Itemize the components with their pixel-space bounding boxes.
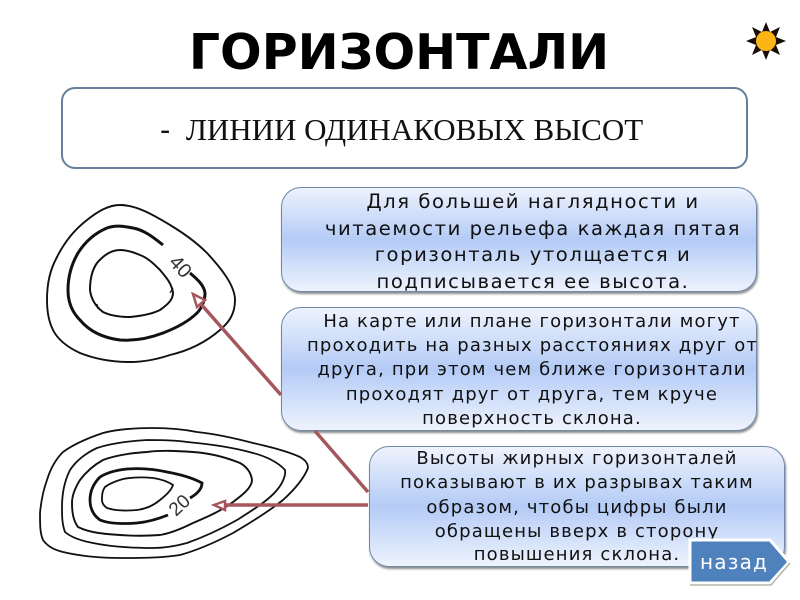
text panel: thick contours — [281, 187, 757, 292]
text lines: Высоты жирных горизонталей — [416, 448, 738, 469]
text lines: На карте или плане горизонтали могут — [323, 311, 741, 332]
map height label: 20: 20 — [165, 491, 195, 521]
text lines: друга, при этом чем ближе горизонтали — [317, 359, 747, 380]
text lines: подписывается ее высота. — [377, 270, 689, 293]
text panel: contour spacing — [281, 307, 757, 431]
text lines: образом, чтобы цифры были — [426, 497, 728, 518]
text lines: Для большей наглядности и — [366, 190, 700, 213]
definition text: - ЛИНИИ ОДИНАКОВЫХ ВЫСОТ — [160, 112, 643, 147]
text lines — [400, 448, 754, 565]
definition panel — [61, 87, 748, 169]
text lines: обращены вверх в сторону — [435, 521, 719, 542]
text lines: проходят друг от друга, тем круче — [346, 384, 718, 405]
text lines: горизонталь утолщается и — [375, 243, 691, 266]
text panel: height labels — [369, 446, 785, 567]
text lines: поверхность склона. — [422, 408, 642, 429]
contour map: bottom — [39, 427, 309, 559]
text lines — [307, 311, 758, 429]
map height label: 40: 40 — [164, 251, 196, 283]
text lines — [325, 190, 741, 293]
button: back — [688, 538, 790, 586]
text lines: проходить на разных расстояниях друг от — [307, 335, 758, 356]
text lines: показывают в их разрывах таким — [400, 472, 754, 493]
text lines: читаемости рельефа каждая пятая — [325, 217, 741, 240]
contour map: top — [46, 204, 236, 363]
title: ГОРИЗОНТАЛИ — [189, 24, 609, 81]
button label: назад — [700, 550, 768, 574]
text lines: повышения склона. — [474, 544, 680, 565]
